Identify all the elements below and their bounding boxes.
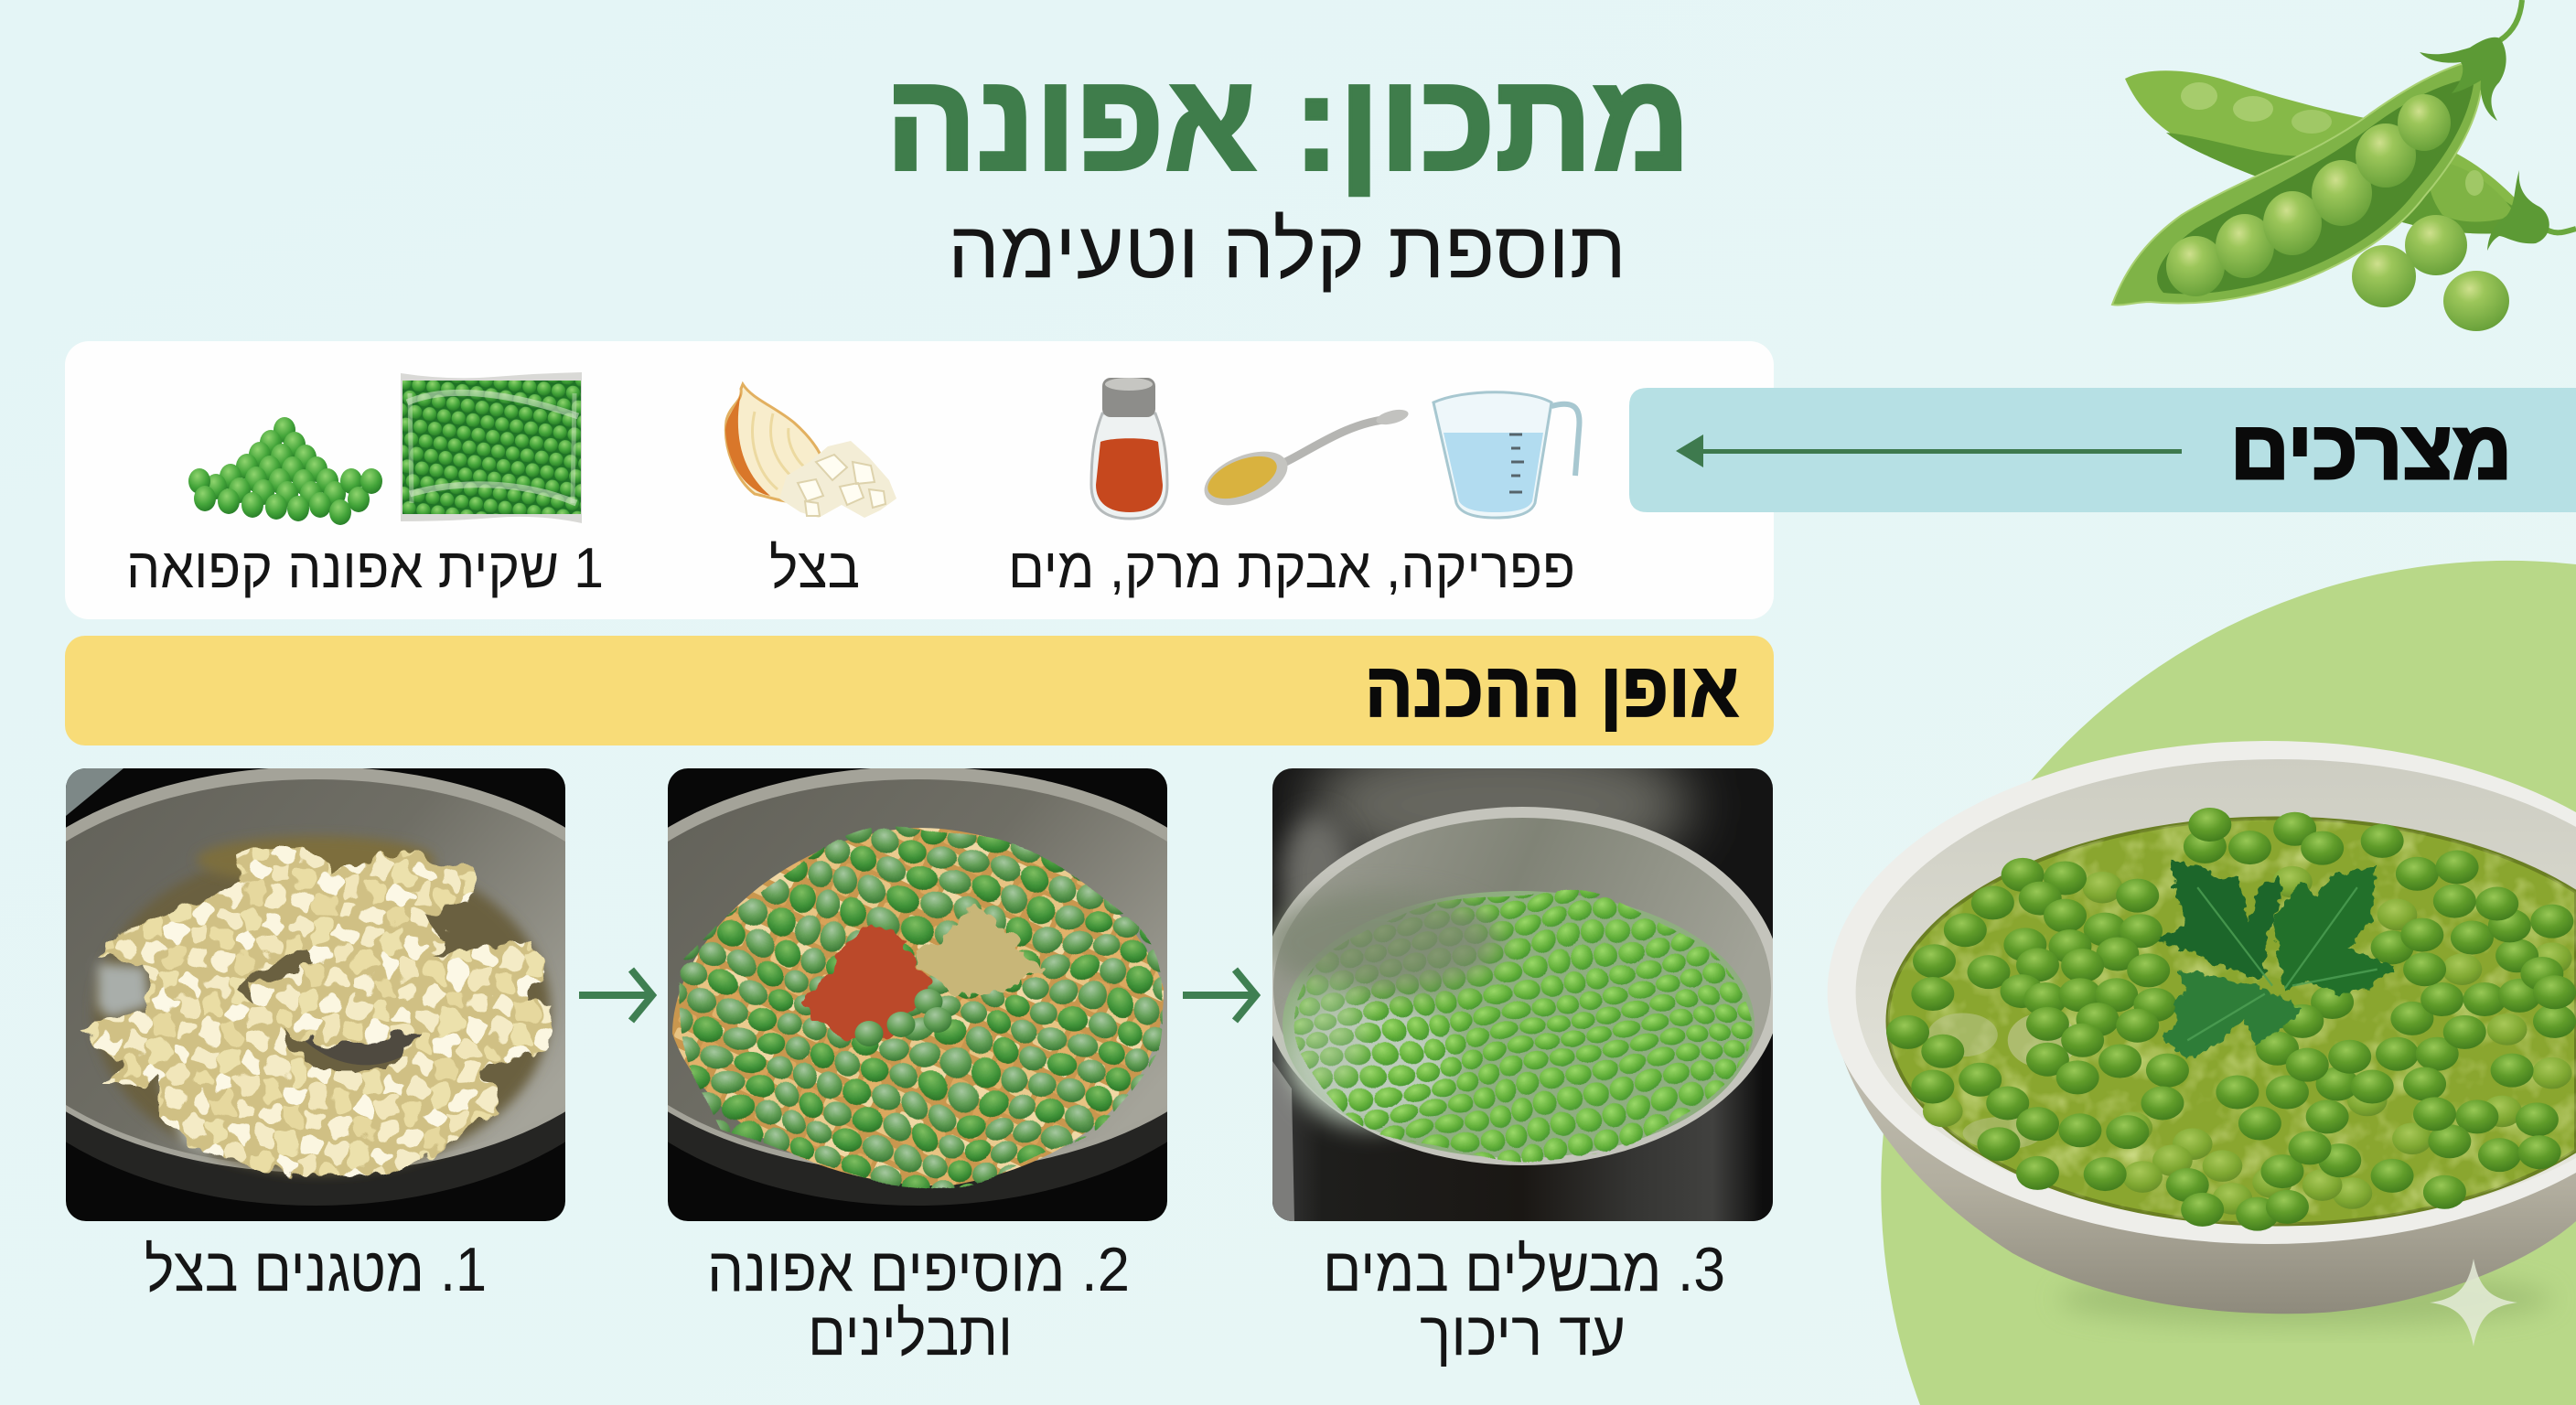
photo: bowl of pea stew — [1828, 741, 2576, 1326]
arrow: ingredients pointer — [1676, 434, 2182, 467]
label: paprika, soup powder, water: פפריקה, אבקת מרק, מים — [1008, 537, 1575, 600]
icon: measuring jug — [1433, 392, 1579, 518]
heading: preparation: אופן ההכנה — [1365, 647, 1739, 733]
banner: ingredients — [1629, 388, 2576, 512]
garnish: parsley — [2158, 863, 2395, 1059]
caption: step 3 — [1323, 1235, 1725, 1368]
icon: pea pods — [2112, 0, 2576, 331]
arrow: step 2 to 3 — [1183, 970, 1256, 1021]
icon: onion — [725, 384, 896, 518]
icon: frozen peas bag — [401, 372, 582, 523]
label: frozen peas: 1 שקית אפונה קפואה — [126, 537, 604, 600]
icon: spoon with soup powder — [1197, 407, 1410, 516]
arrow: step 1 to 2 — [579, 970, 652, 1021]
subtitle: תוספת קלה וטעימה — [948, 204, 1626, 295]
photo: step 2 peas and spices — [668, 768, 1167, 1221]
icon: sparkle watermark — [2430, 1259, 2517, 1346]
peas — [1886, 808, 2576, 1231]
label: onion: בצל — [769, 537, 860, 600]
icon: paprika shaker — [1091, 378, 1167, 519]
caption: step 3: 3. מבשלים במים — [1323, 1235, 1725, 1304]
icon: frozen peas pile — [188, 417, 382, 525]
background circle — [1881, 561, 2576, 1405]
caption: step 2: ותבלינים — [808, 1299, 1013, 1368]
caption: step 2: 2. מוסיפים אפונה — [707, 1235, 1130, 1304]
panel: ingredients — [65, 341, 1774, 619]
heading: ingredients: מצרכים — [2230, 405, 2512, 497]
caption: step 3: עד ריכוך — [1420, 1299, 1626, 1368]
caption: step 2 — [707, 1235, 1130, 1368]
photo: step 1 frying onion — [66, 768, 565, 1221]
banner: preparation — [65, 636, 1774, 745]
caption: step 1: 1. מטגנים בצל — [145, 1235, 487, 1304]
title: מתכון: אפונה — [886, 45, 1690, 198]
photo: step 3 boiling peas — [1272, 768, 1773, 1221]
